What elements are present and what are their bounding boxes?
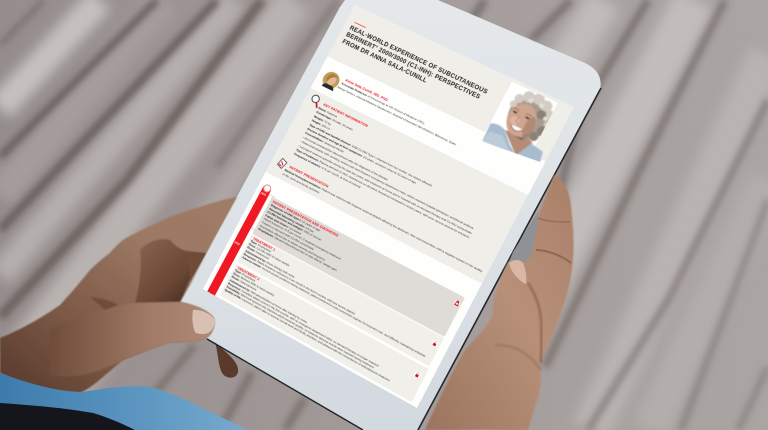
- diagnosis text: Attack frequency: 4–5 per month, 3 required emergency treatment: [263, 218, 341, 261]
- tablet screen: article page: [203, 5, 574, 408]
- patient information rows: Name: Katarina: [318, 107, 337, 119]
- diagnosis text: Prophylaxis: Danazol discontinued due to side effects, weight gain: [257, 228, 337, 272]
- title: BERINERT® 2000/3000 (C1-INH): PERSPECTIVES: [345, 31, 482, 101]
- patient information rows: Height: 165 cm: [311, 119, 331, 131]
- photo block: Dr Anna Sala-Cunill: [482, 82, 558, 162]
- diagnosis text: Treated on demand with C1-INH concentrate: [261, 221, 314, 251]
- treatment 2 text: Dose: Berinert 2000 IU twice weekly: [232, 272, 275, 297]
- panel: title band: [328, 5, 574, 161]
- author affiliation: Allergy Section, Internal Medicine Department, Hospital Universitari Vall d'Hebron, Barcelona, Spain: [337, 86, 456, 146]
- accent rule: [354, 22, 366, 28]
- timeline red bar: [207, 184, 272, 296]
- patient information rows: Disease duration and age at first symptoms: 22 years, symptom onset at 12 years of age: [306, 128, 417, 185]
- treatment 2 text: Tolerability: Mild local injection-site reactions which resolved quickly; no systemic adverse events were reported during treatment: [226, 285, 374, 369]
- panel: treatment 2: [219, 264, 429, 402]
- treatment 2 text: Administered by: Self-administration at home after training by nurse: [229, 279, 308, 324]
- icon: flask: [454, 300, 460, 306]
- icon: vial: [432, 340, 438, 347]
- thumbnail: [192, 310, 215, 334]
- right hand: [425, 175, 574, 430]
- timeline year 2: 2018: [234, 241, 240, 246]
- patient information rows: [293, 106, 474, 239]
- icon: vial: [414, 371, 421, 378]
- tablet rear shadow between right finger and thumb: [508, 212, 538, 264]
- panel: patient presentation and diagnosis: [252, 197, 465, 337]
- shirt: [482, 122, 544, 162]
- diagnosis text: Diagnosis of HAE type I: 12 years of age: [270, 204, 321, 232]
- patient information rows: Weight: 72 kg: [313, 115, 331, 126]
- left hand: [0, 197, 237, 393]
- treatment 2 text: Route: Subcutaneous: [231, 276, 257, 292]
- treatment 1 text: Route: Intravenous: [246, 246, 269, 261]
- heading: PATIENT PRESENTATION AND DIAGNOSIS: [272, 200, 339, 238]
- heading: key patient information: KEY PATIENT INFORMATION: [323, 103, 368, 128]
- treatment 2 text: Type: Prophylaxis: [234, 269, 256, 283]
- heading: TREATMENT 2: [237, 266, 260, 281]
- hair: [507, 90, 553, 162]
- panel: key patient information: [266, 88, 528, 284]
- treatment 1 text: Dose: C1-INH 1000 IU twice weekly: [248, 243, 290, 267]
- diagnosis text: Prophylaxis offered due to attack severity and frequency: [259, 224, 326, 262]
- face: [501, 99, 543, 142]
- diagnosis text: [257, 204, 341, 272]
- patient presentation text: Medical history/presentation: Patient was referred with frequent oedema attacks affecting the abdomen, face and extremities, with a negative impact on her quality of life, work and family activities: [282, 169, 483, 273]
- diagnosis text: Abnormal laboratory results: C4 low: [268, 207, 314, 233]
- author role: Associate Professor of Immunology at UIC School of Medicine (UIC),: [341, 82, 425, 126]
- diagnosis text: C1-INH function and antigen: 20% of normal: [266, 211, 322, 242]
- patient information rows: • Abdominal attacks with vomiting, severe pain and frequent emergency department visits, which required hospital admission, peripheral oedema: [300, 140, 474, 230]
- connector lines: [251, 194, 275, 231]
- author name: Anna Sala-Cunill, MD, PhD: [344, 78, 389, 102]
- heading: patient presentation: PATIENT PRESENTATION: [289, 166, 329, 189]
- author portrait thumbnail: [322, 72, 340, 92]
- treatment 1 text: Adverse events: Venous access problems during treatment, patient preferred a more convenient regimen for long-term use, and difficulty maintaining schedule: [241, 256, 426, 358]
- timeline marker: [262, 183, 273, 194]
- middle finger: [185, 253, 206, 281]
- thumbnail: [509, 260, 526, 284]
- patient information rows: • Hormonal contraception discontinued after the diagnosis of the disease: [302, 136, 388, 182]
- treatment 1 text: Type: Prophylaxis: [250, 240, 271, 253]
- treatment 1 text: Response: Attack frequency reduced to 2 per month in the first 6 months, with less severe attacks: [243, 253, 355, 316]
- patient information rows: Frequency of attacks: 4–5 per month, at time of referral: [293, 153, 361, 189]
- icon: patient chart: [276, 158, 288, 169]
- treatment 1 text: Administered by: Home therapy with nurse: [245, 250, 295, 279]
- heading: TREATMENT 1: [252, 237, 276, 252]
- title: FROM DR ANNA SALA-CUNILL: [341, 38, 428, 84]
- diagnosis text: Father and sisters: not tested: [265, 214, 302, 236]
- panel: author band: [311, 56, 546, 195]
- icon: magnifier: [311, 94, 320, 108]
- patient information rows: Comorbidities: Seasonal rhinitis: [304, 132, 344, 154]
- treatment 2 text: Quality of life: Improved, patient able to resume normal work and family activities, and pleased with the convenience of subcutaneous treatment: [224, 289, 390, 383]
- title: REAL-WORLD EXPERIENCE OF SUBCUTANEOUS: [348, 24, 489, 95]
- patient information rows: Type of treatment: Plasma-derived C1-INH, intravenous on demand, frequency increased in recent years, with poor venous access for infusions: [295, 149, 470, 239]
- panel: treatment 1: [237, 235, 444, 366]
- denim sleeve: [0, 373, 248, 430]
- treatment 2 text: Response: Complete attack control in the first months, with no emergency department visits; on-demand therapy no longer required: [227, 282, 379, 368]
- timeline year 1: 2015: [260, 192, 266, 197]
- patient information rows: Type of HAE and familial disease: HAE-C1-INH Type I, inherited from her mother, two sisters affected: [309, 123, 432, 187]
- panel: treatment timeline: [203, 172, 482, 408]
- patient information rows: Gender/age: Female, 34 years: [315, 111, 353, 132]
- palm shadow: [135, 239, 205, 303]
- patient information rows: • Laryngeal oedema episodes during the past two years, with treatment at home and in hospital with on-demand therapy and C1-INH concentrate: [298, 144, 472, 235]
- thumb: [50, 302, 214, 377]
